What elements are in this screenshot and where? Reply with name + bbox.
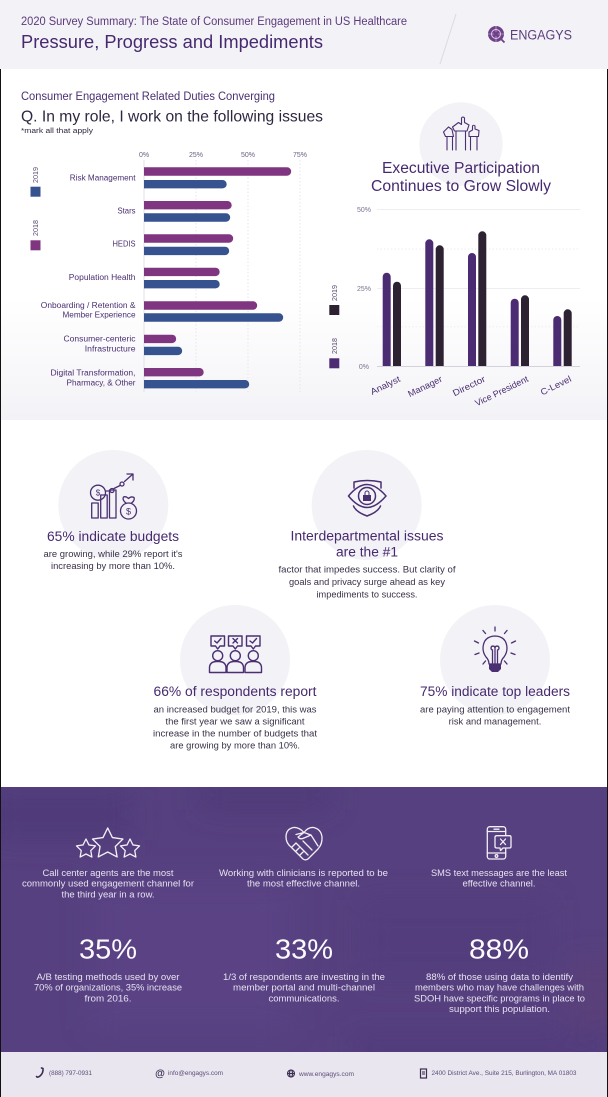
text: call center agents: the third year in a row. <box>62 889 154 899</box>
description: impediments to success. <box>316 589 418 599</box>
description: factor that impedes success. But clarity of <box>278 565 456 575</box>
legend: 2019 <box>33 167 40 183</box>
description: increase in the number of budgets that <box>153 729 318 739</box>
stat: 33%: communications. <box>268 993 340 1003</box>
text: working with clinicians: Working with clinicians is reported to be <box>219 868 388 878</box>
panel: engagement channels <box>0 780 608 1060</box>
text: sms messages: effective channel. <box>462 879 536 889</box>
stat: 66% respondents <box>153 605 318 750</box>
website: www.engagys.com <box>298 1071 354 1078</box>
category labels: Digital Transformation, <box>50 369 136 378</box>
description: goals and privacy surge ahead as key <box>289 577 446 587</box>
text: call center agents <box>22 868 194 899</box>
icon: building <box>420 1069 426 1078</box>
stat: 35%: 35% <box>79 934 137 964</box>
bar chart: duties by year <box>30 152 307 392</box>
description <box>420 704 571 726</box>
stat: 35%: 70% of organizations, 35% increase <box>34 983 182 993</box>
panel: executive participation <box>329 102 580 408</box>
heading: 66% of respondents report <box>154 684 317 699</box>
icon: stars <box>76 828 140 857</box>
category labels <box>369 374 573 408</box>
icon: three people voting <box>210 636 262 672</box>
category labels: HEDIS <box>112 240 136 249</box>
stat: 33%: 33% <box>275 934 333 964</box>
legend: 2019 <box>332 285 339 301</box>
legend: 2018 <box>33 220 40 236</box>
category labels: Pharmacy, & Other <box>66 378 136 387</box>
report subtitle: 2020 Survey Summary: The State of Consumer Engagement in US Healthcare <box>21 16 407 28</box>
y axis labels: 0% <box>359 364 369 371</box>
icon: phone <box>36 1068 43 1077</box>
2019 columns <box>393 231 572 366</box>
stat: 35%: A/B testing methods used by over <box>36 972 180 982</box>
heading: 75% indicate top leaders <box>420 684 570 699</box>
stat: 88% <box>414 934 585 1014</box>
description: an increased budget for 2019, this was <box>154 704 317 714</box>
text: sms messages <box>431 868 568 889</box>
category labels: Manager <box>406 374 444 399</box>
stat: 88%: 88% of those using data to identify <box>426 972 574 982</box>
stat: 33%: member portal and multi-channel <box>233 983 375 993</box>
description: increasing by more than 10%. <box>51 561 175 571</box>
text: call center agents: Call center agents are the most <box>42 868 174 878</box>
y axis labels: 25% <box>357 286 371 293</box>
chart title: Executive Participation <box>382 160 540 177</box>
category labels: C-Level <box>539 374 573 397</box>
stat: 65% budgets: $ <box>96 488 101 498</box>
2018 columns <box>383 239 561 366</box>
logo: ENGAGYS <box>510 28 572 42</box>
stat: 88%: members who may have challenges with <box>415 983 584 993</box>
stat: 65% budgets <box>44 450 183 571</box>
axis labels: 75% <box>293 152 307 159</box>
icon: budget growth <box>90 474 136 519</box>
panel: executive participation: Continues to Grow Slowly <box>371 178 551 195</box>
note: *mark all that apply <box>21 128 94 135</box>
2019 bars <box>144 180 283 388</box>
stat: 75% top leaders <box>420 605 571 726</box>
heading <box>290 529 444 560</box>
category labels: Population Health <box>69 273 136 282</box>
stat: 33%: 1/3 of respondents are investing in the <box>223 972 385 982</box>
phone number: (888) 797-0931 <box>49 1070 92 1077</box>
icon: globe <box>288 1070 294 1077</box>
stat: 33% <box>223 934 385 1003</box>
description: risk and management. <box>449 716 541 726</box>
category labels <box>41 174 136 387</box>
category labels: Risk Management <box>70 174 136 183</box>
stat: 65% budgets: $ <box>126 506 131 516</box>
description: are growing, while 29% report it's <box>44 549 183 559</box>
address: 2400 District Ave., Suite 215, Burlington, MA 01803 <box>432 1070 577 1077</box>
legend <box>329 285 339 368</box>
icon: handshake <box>286 827 322 860</box>
description <box>278 565 456 599</box>
category labels: Infrastructure <box>85 344 136 353</box>
category labels: Member Experience <box>62 311 136 320</box>
axis labels <box>139 152 307 159</box>
axis labels: 25% <box>189 152 203 159</box>
description <box>153 704 318 750</box>
description: are paying attention to engagement <box>420 704 571 714</box>
stat: 35% <box>34 934 182 1003</box>
icon: light bulb <box>483 636 507 664</box>
logo <box>488 26 572 42</box>
y axis labels <box>357 207 371 371</box>
section heading: duties converging: Consumer Engagement Related Duties Converging <box>21 91 275 103</box>
y axis labels: 50% <box>357 207 371 214</box>
stat: 88%: support this population. <box>449 1004 550 1014</box>
axis labels: 0% <box>139 152 149 159</box>
header band <box>0 0 608 69</box>
icon: phone with rejected message <box>487 827 511 859</box>
survey question: Q. In my role, I work on the following issues <box>21 108 323 126</box>
email: info@engagys.com <box>168 1070 223 1077</box>
text: working with clinicians <box>219 868 388 889</box>
heading: are the #1 <box>336 545 398 560</box>
category labels: Analyst <box>369 374 402 397</box>
legend: 2018 <box>332 338 339 354</box>
description: are growing by more than 10%. <box>170 740 300 750</box>
category labels: Director <box>451 374 487 398</box>
text: call center agents: commonly used engagement channel for <box>22 879 194 889</box>
stat: interdepartmental issues <box>278 450 456 599</box>
legend <box>30 167 40 250</box>
2018 bars <box>144 167 291 376</box>
stat: 88%: SDOH have specific programs in place to <box>414 993 585 1003</box>
category labels: Vice President <box>473 374 530 408</box>
report title: Pressure, Progress and Impediments <box>21 32 323 52</box>
description <box>44 549 183 571</box>
heading: 65% indicate budgets <box>47 529 179 544</box>
category labels: Stars <box>118 206 136 216</box>
icon: at sign: @ <box>155 1068 165 1080</box>
icon: eye and shield <box>348 480 386 516</box>
heading: Interdepartmental issues <box>290 529 444 544</box>
axis labels: 50% <box>241 152 255 159</box>
text: working with clinicians: the most effective channel. <box>247 879 360 889</box>
description: the first year we saw a significant <box>166 716 305 726</box>
stat: 35%: from 2016. <box>84 993 132 1003</box>
footer: contact details <box>0 1052 608 1097</box>
column chart <box>329 207 580 408</box>
category labels: Onboarding / Retention & <box>41 301 136 310</box>
icon: raised hands <box>444 117 479 150</box>
stat: 88%: 88% <box>469 934 529 964</box>
text: sms messages: SMS text messages are the least <box>431 868 568 878</box>
category labels: Consumer-centeric <box>64 335 136 344</box>
